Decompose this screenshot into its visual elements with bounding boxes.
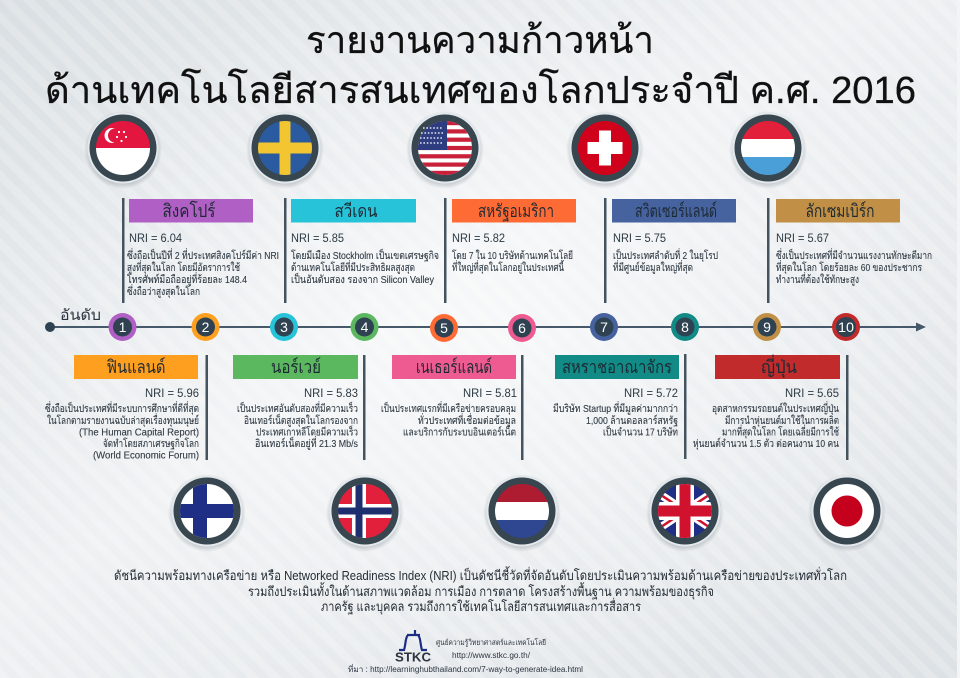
flag: Sweden [246,111,324,189]
panel: Switzerland: เป็นประเทศลำดับที่ 2 ในยุโรป [613,248,718,262]
rank 1: 1 [119,319,127,335]
rank heading: อันดับ [60,307,101,324]
panel: Singapore: ซึ่งถือว่าสูงสุดในโลก [127,284,200,298]
rank 5: 5 [440,320,448,336]
panel: Sweden [284,198,439,303]
flag: Luxembourg [729,111,807,189]
title: รายงานความก้าวหน้า [306,20,654,62]
panel: Luxembourg: ทำงานที่ต้องใช้ทักษะสูง [776,272,859,286]
rank 4 [350,313,378,341]
panel: Finland: ซึ่งถือเป็นประเทศที่มีระบบการศึกษาที่ดีที่สุด [45,401,199,415]
panel: Japan: มีการนำหุ่นยนต์มาใช้ในการผลิต [725,414,839,427]
rank 4: 4 [361,319,369,335]
panel: Singapore: NRI = 6.04 [129,231,182,245]
flag: Finland [168,474,246,552]
panel: United Kingdom: 1,000 ล้านดอลลาร์สหรัฐ [586,414,678,427]
panel: Luxembourg [767,198,932,303]
rank 6 [508,314,536,342]
rank 6: 6 [518,320,526,336]
flag: Switzerland [566,111,644,189]
flag: Netherlands [483,474,561,552]
panel: Norway: อินเทอร์เน็ตอยู่ที่ 21.3 Mb/s [255,436,358,450]
panel: Netherlands [381,355,524,460]
rank 2: 2 [202,319,210,335]
panel: Japan: NRI = 5.65 [785,386,839,400]
panel: Norway: เป็นประเทศอันดับสองที่มีความเร็ว [237,401,358,415]
source credits: ศูนย์ความรู้วิทยาศาสตร์และเทคโนโลยี [436,638,546,647]
panel: Singapore [122,198,279,303]
panel: Japan: อุตสาหกรรมรถยนต์ในประเทศญี่ปุ่น [712,401,839,415]
panel: Singapore: สิงคโปร์ [162,200,216,221]
flag: Singapore [84,111,162,189]
rank 3 [270,313,298,341]
panel: Japan [693,354,848,460]
panel: Norway: ประเทศเกาหลีโดยมีความเร็ว [256,424,358,438]
rank 9: 9 [763,319,771,335]
rank 10 [832,313,860,341]
source credits: ที่มา : http://learninghubthailand.com/7-way-to-generate-idea.html [348,663,583,674]
panel: Switzerland: สวิตเซอร์แลนด์ [635,201,717,221]
rank 1 [108,313,136,341]
title [45,20,916,112]
panel: Norway: NRI = 5.83 [304,386,358,400]
description: ภาครัฐ และบุคคล รวมถึงการใช้เทคโนโลยีสารสนเทศและการสื่อสาร [321,598,641,615]
panel: United Kingdom: สหราชอาณาจักร [562,357,672,377]
description [114,566,847,615]
logo: STKC [395,630,431,664]
description: รวมถึงประเมินทั้งในด้านสภาพแวดล้อม การเมือง การตลาด โครงสร้างพื้นฐาน ความพร้อมของธุรกิจ [248,582,714,600]
rank 8: 8 [681,319,689,335]
panel: Luxembourg: ที่สุดในโลก โดยร้อยละ 60 ของประชากร [776,260,922,274]
panel: United Kingdom: มีบริษัท Startup ที่มีมูลค่ามากกว่า [553,401,678,415]
source credits: http://www.stkc.go.th/ [452,651,531,660]
panel: Luxembourg: NRI = 5.67 [776,231,829,245]
panel: Netherlands: NRI = 5.81 [463,386,517,400]
panel: United Kingdom [553,354,686,459]
flag: Norway [326,474,404,552]
panel: United Kingdom: เป็นจำนวน 17 บริษัท [603,424,678,438]
panel: United States [444,198,576,303]
panel: United States: NRI = 5.82 [452,231,505,245]
panel: United States: สหรัฐอเมริกา [478,201,554,222]
panel: Finland: ในโลกตามรายงานฉบับล่าสุดเรื่องทุนมนุษย์ [47,413,199,427]
panel: Sweden: NRI = 5.85 [291,231,344,245]
panel: Switzerland [604,198,736,303]
panel: Netherlands: เป็นประเทศแรกที่มีเครือข่ายครอบคลุม [381,401,516,415]
panel: Sweden: เป็นอันดับสอง รองจาก Silicon Valley [291,272,435,286]
rank 7 [590,313,618,341]
panel: Finland [45,355,208,462]
panel: Singapore: โทรศัพท์มือถืออยู่ที่ร้อยละ 148.4 [127,272,247,286]
panel: United Kingdom: NRI = 5.72 [624,386,678,400]
panel: Finland: NRI = 5.96 [145,386,199,400]
panel: Finland: จัดทำโดยสภาเศรษฐกิจโลก [103,437,199,450]
panel: Finland: (World Economic Forum) [93,450,199,462]
panel: Singapore: ซึ่งถือเป็นปีที่ 2 ที่ประเทศสิงคโปร์มีค่า NRI [127,248,279,262]
panel: Japan: ญี่ปุ่น [761,354,797,378]
title: ด้านเทคโนโลยีสารสนเทศของโลกประจำปี ค.ศ. 2016 [45,68,916,112]
flag: Japan [808,474,886,552]
panel: Singapore: สูงที่สุดในโลก โดยมีอัตราการใช้ [127,260,240,274]
panel: Norway: นอร์เวย์ [271,357,321,377]
rank 2 [192,313,220,341]
panel: Luxembourg: ลักเซมเบิร์ก [806,201,874,221]
source credits [348,638,583,674]
flag: United Kingdom [646,474,724,552]
panel: Switzerland: NRI = 5.75 [613,231,666,245]
panel: Sweden: ด้านเทคโนโลยีที่มีประสิทธิผลสูงสุด [291,260,415,274]
flag: United States [406,111,484,189]
panel: Norway: อินเทอร์เน็ตสูงสุดในโลกรองจาก [244,413,358,427]
panel: Sweden: โดยมีเมือง Stockholm เป็นเขตเศรษฐกิจ [291,248,439,262]
timeline [45,307,926,342]
panel: Sweden: สวีเดน [334,201,378,221]
panel: Japan: หุ่นยนต์จำนวน 1.5 ตัว ต่อคนงาน 10 คน [693,437,839,450]
rank 10: 10 [838,319,854,335]
rank 5 [430,314,458,342]
panel: Netherlands: เนเธอร์แลนด์ [416,357,492,377]
rank 9 [753,313,781,341]
panel: Finland: (The Human Capital Report) [79,426,199,438]
description: ดัชนีความพร้อมทางเครือข่าย หรือ Networked Readiness Index (NRI) เป็นดัชนีชี้วัดที่จัดอันดับโดยประเมินความพร้อมด้านเครือข่ายของประเทศทั่วโลก [114,566,847,583]
panel: United States: โดย 7 ใน 10 บริษัทด้านเทคโนโลยี [452,249,573,262]
panel: Norway [233,355,366,460]
panel: Netherlands: ทั่วประเทศที่เชื่อมต่อข้อมูล [418,413,516,427]
panel: Japan: มากที่สุดในโลก โดยเฉลี่ยมีการใช้ [722,424,839,438]
rank 3: 3 [280,319,288,335]
rank 8 [671,313,699,341]
rank 7: 7 [600,319,608,335]
panel: Netherlands: และบริการกับระบบอินเตอร์เน็ต [403,424,516,438]
panel: United States: ที่ใหญ่ที่สุดในโลกอยู่ในประเทศนี้ [452,260,564,274]
panel: Switzerland: ที่มีศูนย์ข้อมูลใหญ่ที่สุด [613,260,693,274]
panel: Finland: ฟินแลนด์ [106,357,166,377]
logo: STKC: STKC [395,650,431,664]
